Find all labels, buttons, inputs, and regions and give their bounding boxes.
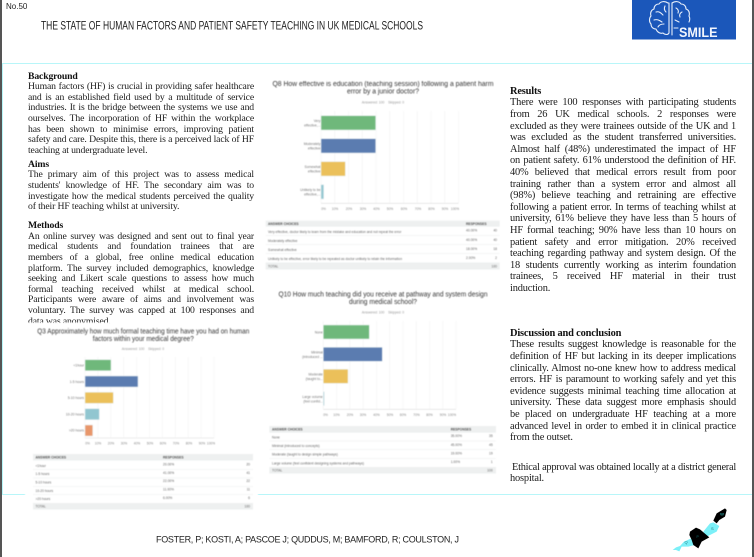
- text block: methods: medical students and foundation trainees that are: [28, 241, 254, 252]
- chart: Q8 effectiveness of education: 30%: [360, 207, 366, 211]
- chart: Q3 teaching time: 6.00%: [163, 496, 172, 500]
- text block: results: (98%) believe teaching and retraining are effective: [510, 190, 736, 201]
- chart: Q3 teaching time: 11: [247, 488, 250, 492]
- chart: Q8 effectiveness of education: Somewhat: [304, 165, 321, 169]
- chart: Q10 pathway and system design teaching: 100%: [448, 413, 456, 417]
- chart: Q10 pathway and system design teaching: 19: [489, 452, 493, 456]
- authors: FOSTER, P; KOSTI, A; PASCOE J; QUDDUS, M; BAMFORD, R; COULSTON, J: [156, 534, 459, 544]
- text block: results: 40% believed that medical errors result from poor: [510, 167, 736, 178]
- chart: Q3 teaching time: 20%: [108, 442, 114, 446]
- chart: Q3 teaching time: 40%: [134, 442, 140, 446]
- chart: Q3 teaching time: 22: [246, 479, 250, 483]
- chart: Q3 teaching time: <1hour: [73, 364, 85, 368]
- chart: Q10 pathway and system design teaching: ANSWER CHOICES: [272, 428, 303, 432]
- text block: results: from 26 UK medical schools. 2 responses were: [510, 109, 736, 120]
- text block: results: was excluded as the student transferred universities.: [510, 132, 736, 143]
- chart: Q8 effectiveness of education: 40: [493, 238, 497, 242]
- chart: Q10 pathway and system design teaching: TOTAL: [272, 468, 282, 472]
- chart: Q10 pathway and system design teaching: 50%: [387, 413, 393, 417]
- chart: Q10 pathway and system design teaching: 80%: [426, 413, 433, 417]
- text block: discussion and conclusion: be placed on undergraduate HF teaching at a more: [510, 409, 736, 420]
- chart: Q3 teaching time: 1-5 hours: [36, 472, 50, 476]
- text block: background: industries. It is the bridge between the systems we use and: [28, 102, 254, 113]
- chart: Q8 effectiveness of education: Q8 How effective is education (teaching session) following a patient harm: [272, 81, 494, 88]
- chart: Q10 pathway and system design teaching: Minimal: [311, 350, 323, 354]
- chart: Q10 pathway and system design teaching: 60%: [400, 413, 406, 417]
- chart: Q10 pathway and system design teaching: during medical school?: [349, 299, 417, 306]
- chart: Q3 teaching time: TOTAL: [36, 504, 46, 508]
- text block: aims: of their HF teaching whilst at university.: [28, 201, 179, 212]
- text block: background: ourselves. The incorporation of HF within the workplace: [28, 113, 254, 124]
- chart: Q3 teaching time: 20: [246, 462, 250, 466]
- text block: methods: Participants were aware of aims and involvement was: [28, 294, 254, 305]
- chart: Q8 effectiveness of education: 40%: [373, 207, 380, 211]
- chart: Q10 pathway and system design teaching: Large volume: [302, 395, 323, 399]
- chart: Q10 pathway and system design teaching: Moderate (taught to design simple pathways): [272, 452, 338, 456]
- text block: aims: [28, 159, 254, 212]
- text block: results: excluded as they were trainees outside of the UK and 1: [510, 121, 736, 132]
- text block: results: university, 61% believe they have less than 5 hours of: [510, 213, 736, 224]
- chart: Q3 teaching time: 41.00%: [163, 471, 174, 475]
- text block: background: has been shown to minimise errors, improving patient: [28, 124, 254, 135]
- text block: discussion and conclusion: advanced level in order to embed it in clinical practice: [510, 421, 736, 432]
- chart: Q10 pathway and system design teaching: (introduced ...: [302, 355, 323, 359]
- chart: Q8 effectiveness of education: 90%: [442, 207, 448, 211]
- chart: Q10 pathway and system design teaching: 20%: [347, 413, 353, 417]
- chart: Q8 effectiveness of education: [266, 81, 500, 270]
- text block: discussion and conclusion: errors. HF is paramount to working safely and yet this: [510, 374, 736, 385]
- text block: ethical approval: [510, 462, 736, 484]
- chart: Q3 teaching time: 10%: [95, 442, 101, 446]
- chart: Q8 effectiveness of education: 40.00%: [466, 238, 477, 242]
- text block: aims: Aims: [28, 159, 49, 170]
- logo: SMILE brain: SMILE: [679, 25, 718, 40]
- chart: Q3 teaching time: 0%: [85, 442, 90, 446]
- chart: Q8 effectiveness of education: Somewhat effective: [268, 248, 297, 252]
- chart: Q10 pathway and system design teaching: Answered: 100 Skipped: 0: [362, 310, 404, 314]
- chart: Q3 teaching time: Q3 Approximately how much formal teaching time have you had on human: [37, 328, 249, 336]
- right page edge: [752, 0, 754, 557]
- text block: methods: platform. The survey included demographics, knowledge: [28, 262, 254, 274]
- text block: results: patient safety and error mitigation. 20% received: [510, 237, 736, 248]
- chart: Q8 effectiveness of education: 50%: [387, 207, 393, 211]
- text block: methods: formal teaching received whilst at medical school.: [28, 284, 254, 295]
- icon: SMILE regional map: Q: [684, 539, 688, 544]
- text block: background: Background: [28, 70, 78, 82]
- icon: SMILE regional map: S: [711, 526, 714, 531]
- chart: Q10 pathway and system design teaching: 35.00%: [451, 434, 462, 438]
- chart: Q8 effectiveness of education: TOTAL: [268, 264, 278, 268]
- chart: Q10 pathway and system design teaching: 19.00%: [451, 452, 462, 456]
- chart: Q8 effectiveness of education: Very: [314, 119, 321, 123]
- chart: Q8 effectiveness of education: RESPONSES: [466, 222, 487, 226]
- text block: ethical approval: hospital.: [510, 473, 544, 484]
- poster frame border: [2, 63, 753, 495]
- chart: Q10 pathway and system design teaching: Large volume (feel confident designing systems and pathways): [272, 462, 364, 466]
- icon: SMILE regional map: [673, 508, 727, 551]
- chart: Q10 pathway and system design teaching: 1: [491, 460, 493, 464]
- chart: Q10 pathway and system design teaching: None: [315, 330, 323, 334]
- chart: Q10 pathway and system design teaching: RESPONSES: [451, 428, 472, 432]
- chart: Q8 effectiveness of education: 40.00%: [466, 228, 477, 232]
- chart: Q8 effectiveness of education: 2.00%: [466, 256, 475, 260]
- chart: Q10 pathway and system design teaching: (taught to...: [306, 377, 323, 381]
- chart: Q3 teaching time: 80%: [186, 442, 192, 446]
- chart: Q8 effectiveness of education: Unlikely to be effective, error likely to be repeated as doctor unlikely to retain the information: [268, 257, 402, 261]
- chart: Q3 teaching time: 41: [246, 471, 250, 475]
- chart: Q8 effectiveness of education: effective,...: [304, 192, 321, 196]
- chart: Q8 effectiveness of education: effective,...: [304, 124, 321, 128]
- text block: aims: investigate how the medical students perceived the quality: [28, 191, 254, 202]
- text block: background: teaching at undergraduate level.: [28, 145, 147, 156]
- logo: SMILE brain: [632, 0, 736, 40]
- chart: Q8 effectiveness of education: Answered: 100 Skipped: 0: [362, 100, 404, 104]
- chart: Q8 effectiveness of education: 18: [493, 247, 497, 251]
- chart: Q8 effectiveness of education: error by a junior doctor?: [347, 88, 419, 96]
- chart: Q8 effectiveness of education: Very effective, doctor likely to learn from the mistake and education and not repeat the error: [268, 230, 402, 234]
- text block: results: [510, 86, 736, 294]
- text block: background: Human factors (HF) is crucial in providing safer healthcare: [28, 81, 254, 92]
- chart: Q3 teaching time: 20.00%: [163, 462, 174, 466]
- chart: Q8 effectiveness of education: 0%: [321, 207, 326, 211]
- chart: Q10 pathway and system design teaching: 100: [487, 468, 493, 472]
- text block: discussion and conclusion: evidence suggests minimal teaching time allocation at: [510, 386, 736, 397]
- left page edge: [0, 0, 2, 557]
- text block: results: following a patient error. In terms of teaching whilst at: [510, 202, 736, 213]
- chart: Q3 teaching time: 22.00%: [163, 479, 174, 483]
- chart: Q8 effectiveness of education: ANSWER CHOICES: [268, 222, 299, 226]
- chart: Q3 teaching time: 50%: [147, 442, 153, 446]
- icon: SMILE regional map: P: [697, 535, 700, 539]
- chart: Q10 pathway and system design teaching: None: [272, 436, 280, 440]
- text block: background: and is an established field used by a multitude of service: [28, 92, 254, 103]
- chart: Q8 effectiveness of education: 80%: [428, 207, 435, 211]
- chart: Q10 pathway and system design teaching: 90%: [440, 413, 446, 417]
- text block: discussion and conclusion: These results suggest knowledge is reasonable for the: [510, 339, 736, 350]
- chart: Q3 teaching time: 90%: [199, 442, 205, 446]
- chart: Q8 effectiveness of education: Moderately effective: [268, 239, 298, 243]
- chart: Q8 effectiveness of education: 40: [493, 228, 497, 232]
- chart: Q3 teaching time: 60%: [160, 442, 166, 446]
- chart: Q3 teaching time: 5-10 hours: [68, 396, 84, 400]
- chart: Q10 pathway and system design teaching: 1.00%: [451, 460, 460, 464]
- text block: methods: data was anonymised.: [28, 316, 111, 327]
- text block: discussion and conclusion: university. These data suggest more emphasis should: [510, 397, 736, 408]
- text block: methods: seeking and Likert scale questions to assess how much: [28, 273, 254, 284]
- chart: Q8 effectiveness of education: 60%: [401, 207, 407, 211]
- chart: Q8 effectiveness of education: Unlikely to be: [300, 188, 321, 192]
- chart: Q10 pathway and system design teaching: 30%: [360, 413, 366, 417]
- text block: results: 18 students currently working as interim foundation: [510, 260, 736, 271]
- poster number: No.50: [6, 2, 27, 11]
- chart: Q3 teaching time: 70%: [173, 442, 179, 446]
- text block: discussion and conclusion: definition of HF but lacking in its deeper implications: [510, 351, 736, 362]
- chart: Q8 effectiveness of education: effective: [308, 146, 321, 150]
- text block: background: [28, 70, 254, 156]
- chart: Q3 teaching time: >20 hours: [69, 428, 84, 432]
- chart: Q8 effectiveness of education: 18.00%: [466, 247, 477, 251]
- text block: methods: members of a global, free online medical education: [28, 252, 254, 263]
- chart: Q3 teaching time: >20 hours: [36, 497, 51, 501]
- chart: Q10 pathway and system design teaching: 70%: [413, 413, 420, 417]
- chart: Q3 teaching time: 1-5 hours: [70, 380, 84, 384]
- chart: Q10 pathway and system design teaching: Minimal (introduced to concepts): [272, 444, 320, 448]
- chart: Q3 teaching time: Answered: 100 Skipped: 0: [122, 347, 164, 351]
- chart: Q8 effectiveness of education: 10%: [332, 207, 338, 211]
- text block: results: Almost half (48%) underestimated the impact of HF: [510, 144, 736, 155]
- chart: Q8 effectiveness of education: 70%: [415, 207, 421, 211]
- chart: Q8 effectiveness of education: 100: [491, 264, 497, 268]
- chart: Q3 teaching time: 5-10 hours: [36, 480, 52, 484]
- chart: Q3 teaching time: 10-20 hours: [36, 489, 53, 493]
- chart: Q10 pathway and system design teaching: (feel confid...: [303, 400, 323, 404]
- text block: discussion and conclusion: Discussion and conclusion: [510, 328, 621, 339]
- text block: results: HF formal teaching; 90% have less than 10 hours on: [510, 225, 736, 236]
- text block: discussion and conclusion: clinically. Almost no-one knew how to address medical: [510, 363, 736, 374]
- chart: Q8 effectiveness of education: Moderately: [304, 142, 321, 146]
- text block: results: trainees, 5 received HF material in their trust: [510, 271, 736, 282]
- chart: Q10 pathway and system design teaching: 40%: [373, 413, 380, 417]
- text block: methods: voluntary. The survey was capped at 100 responses and: [28, 305, 254, 316]
- chart: Q3 teaching time: 11.00%: [163, 488, 174, 492]
- text block: ethical approval: Ethical approval was obtained locally at a district general: [512, 462, 736, 472]
- chart: Q10 pathway and system design teaching: Q10 How much teaching did you receive at pathway and system design: [278, 292, 488, 298]
- chart: Q10 pathway and system design teaching: 45.00%: [451, 443, 462, 447]
- text block: results: Results: [510, 86, 541, 97]
- text block: results: on patient safety. 61% understood the definition of HF.: [510, 155, 736, 166]
- chart: Q10 pathway and system design teaching: 0%: [323, 413, 328, 417]
- chart: Q3 teaching time: [25, 322, 258, 512]
- text block: discussion and conclusion: from the outset.: [510, 432, 573, 443]
- chart: Q3 teaching time: RESPONSES: [163, 456, 184, 460]
- chart: Q3 teaching time: 100%: [207, 442, 215, 446]
- text block: methods: Methods: [28, 220, 63, 231]
- chart: Q10 pathway and system design teaching: [269, 292, 496, 474]
- chart: Q10 pathway and system design teaching: 45: [489, 443, 493, 447]
- text block: methods: An online survey was designed and sent out to final year: [28, 231, 254, 242]
- chart: Q10 pathway and system design teaching: Moderate: [308, 372, 323, 376]
- text block: results: training rather than a system error and almost all: [510, 179, 736, 190]
- chart: Q8 effectiveness of education: effective: [308, 170, 321, 174]
- chart: Q10 pathway and system design teaching: 35: [489, 434, 493, 438]
- text block: methods: [28, 220, 254, 327]
- text block: discussion and conclusion: [510, 328, 736, 443]
- chart: Q8 effectiveness of education: 20%: [346, 207, 352, 211]
- text block: background: safety and care. Despite this, there is a perceived lack of HF: [28, 134, 254, 145]
- text block: results: There were 100 responses with participating students: [510, 97, 736, 108]
- chart: Q3 teaching time: factors within your medical degree?: [93, 336, 194, 343]
- text block: aims: The primary aim of this project was to assess medical: [28, 169, 254, 180]
- chart: Q3 teaching time: <1hour: [36, 464, 47, 468]
- chart: Q3 teaching time: 30%: [121, 442, 127, 446]
- chart: Q3 teaching time: ANSWER CHOICES: [36, 456, 67, 460]
- chart: Q3 teaching time: 100: [244, 504, 250, 508]
- text block: results: teaching regarding pathway and system design. Of the: [510, 248, 736, 259]
- chart: Q3 teaching time: 6: [248, 496, 250, 500]
- chart: Q8 effectiveness of education: 2: [495, 256, 497, 260]
- icon: SMILE regional map: W: [720, 512, 724, 517]
- chart: Q10 pathway and system design teaching: 10%: [333, 413, 340, 417]
- chart: Q8 effectiveness of education: 100%: [451, 207, 459, 211]
- chart: Q3 teaching time: 10-20 hours: [66, 412, 84, 416]
- text block: aims: students' knowledge of HF. The secondary aim was to: [28, 180, 254, 191]
- text block: results: induction.: [510, 283, 550, 294]
